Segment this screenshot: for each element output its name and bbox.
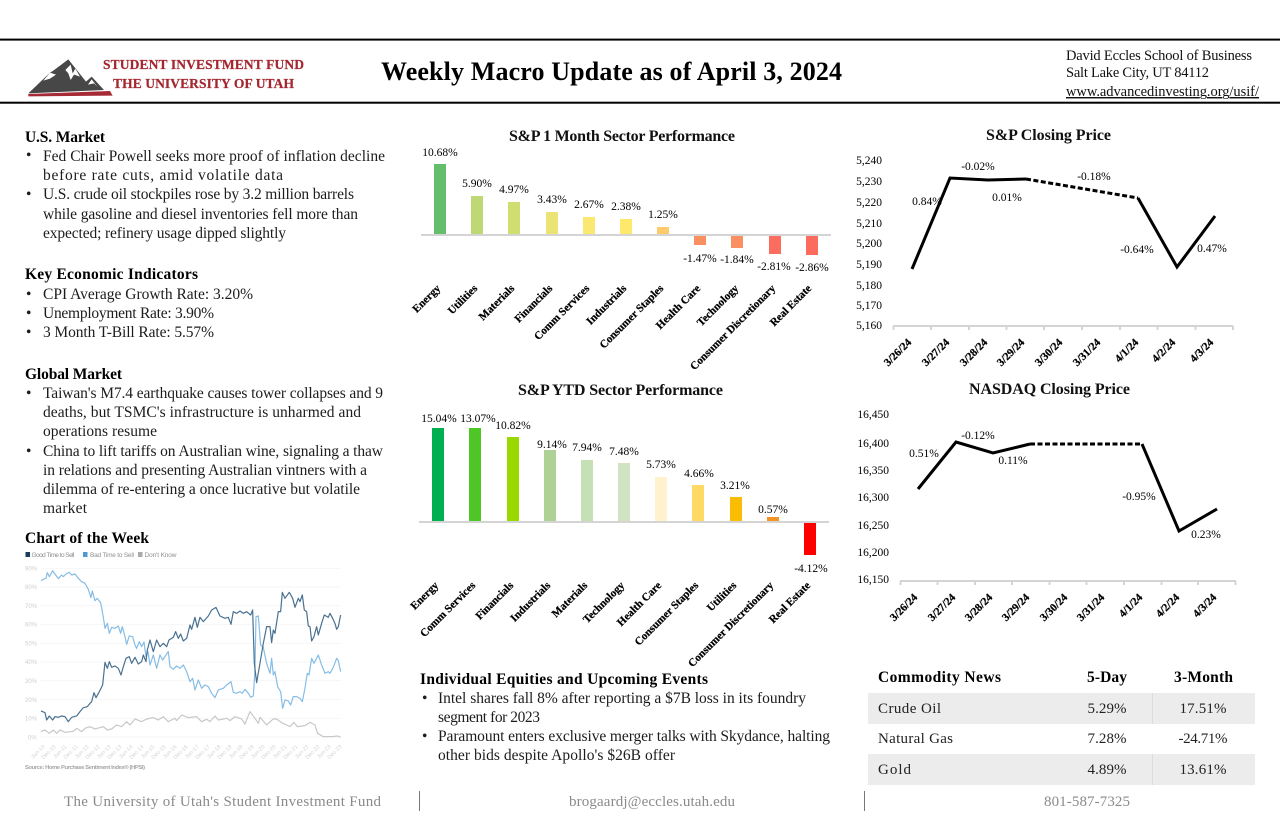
change labels: -0.95% bbox=[1122, 491, 1156, 503]
date labels: 3/26/24 bbox=[888, 591, 920, 624]
panel: Global Market bbox=[25, 366, 384, 517]
panel: Global Market: market bbox=[43, 500, 88, 517]
chart x axis labels: Jun-13 bbox=[96, 744, 112, 760]
y axis labels: 16,200 bbox=[857, 547, 889, 559]
value labels: 5.73% bbox=[646, 459, 676, 471]
chart: S&P 1 month sector performance bbox=[410, 128, 831, 373]
date labels: 3/28/24 bbox=[963, 591, 995, 624]
chart x axis labels: Dec-17 bbox=[195, 744, 211, 761]
panel: U.S. Market: • bbox=[26, 186, 31, 203]
chart: home purchase sentiment bbox=[25, 552, 343, 771]
price line bbox=[912, 178, 1215, 269]
category labels: Industrials bbox=[508, 579, 554, 624]
panel: individual equities and upcoming events: other bids despite Apollo's $26B offer bbox=[438, 747, 676, 764]
panel: U.S. Market: U.S. Market bbox=[25, 129, 106, 146]
value labels: 5.90% bbox=[462, 178, 492, 190]
panel: Global Market: • bbox=[26, 443, 31, 460]
change labels: 0.11% bbox=[998, 455, 1028, 467]
chart y axis: 80% bbox=[25, 585, 38, 591]
date labels: 4/1/24 bbox=[1117, 591, 1145, 620]
date labels: 4/1/24 bbox=[1113, 336, 1141, 365]
chart x axis labels: Jun-21 bbox=[272, 744, 288, 760]
value labels: 13.07% bbox=[460, 413, 496, 425]
chart x axis labels: Jun-14 bbox=[118, 744, 134, 760]
chart source: Source: Home Purchase Sentiment Index® (HPSI) bbox=[25, 764, 145, 771]
x axis bbox=[893, 326, 1233, 330]
chart y axis: 90% bbox=[25, 566, 38, 572]
value labels: 10.82% bbox=[495, 420, 531, 432]
category labels: Real Estate bbox=[767, 580, 813, 626]
footer bbox=[64, 791, 1130, 811]
panel: individual equities and upcoming events bbox=[420, 671, 830, 764]
chart x axis labels bbox=[30, 744, 343, 761]
change labels: 0.51% bbox=[909, 448, 939, 460]
chart x axis labels: Dec-16 bbox=[173, 744, 189, 761]
panel: Key Economic Indicators: CPI Average Growth Rate: 3.20% bbox=[43, 286, 253, 303]
date labels: 4/2/24 bbox=[1150, 336, 1178, 365]
y axis labels: 16,450 bbox=[857, 409, 889, 421]
category labels: Materials bbox=[477, 282, 518, 323]
change labels: -0.64% bbox=[1120, 244, 1154, 256]
panel: individual equities and upcoming events: segment for 2023 bbox=[438, 709, 540, 726]
y axis labels: 5,170 bbox=[856, 300, 882, 312]
value labels bbox=[422, 147, 829, 274]
category labels: Health Care bbox=[615, 580, 664, 629]
chart x axis labels: Jun-23 bbox=[316, 744, 332, 760]
y axis labels bbox=[857, 409, 889, 586]
value labels: 3.43% bbox=[537, 194, 567, 206]
price line bbox=[918, 442, 1217, 531]
category labels: Consumer Discretionary bbox=[686, 579, 776, 670]
chart x axis labels: Dec-14 bbox=[129, 744, 145, 761]
value labels: 9.14% bbox=[537, 439, 567, 451]
panel: Key Economic Indicators bbox=[25, 266, 253, 341]
panel: U.S. Market: expected; refinery usage dipped slightly bbox=[43, 225, 286, 242]
change labels: 0.47% bbox=[1197, 243, 1227, 255]
date labels: 3/27/24 bbox=[920, 336, 952, 369]
value labels: -1.84% bbox=[720, 254, 754, 266]
category labels: Consumer Staples bbox=[597, 282, 667, 351]
category labels: Materials bbox=[550, 579, 591, 620]
chart x axis labels: Dec-22 bbox=[305, 744, 321, 761]
date labels: 3/28/24 bbox=[958, 336, 990, 369]
panel: Key Economic Indicators: Key Economic Indicators bbox=[25, 266, 198, 283]
change labels bbox=[912, 161, 1227, 256]
category labels: Energy bbox=[410, 282, 443, 315]
chart x axis labels: Dec-10 bbox=[41, 744, 57, 761]
category labels: Real Estate bbox=[768, 283, 814, 329]
chart y axis: 20% bbox=[25, 698, 38, 704]
value labels: 15.04% bbox=[421, 413, 457, 425]
panel: Global Market: dilemma of re-entering a once lucrative but volatile bbox=[43, 481, 360, 498]
date labels: 3/30/24 bbox=[1038, 591, 1070, 624]
chart x axis labels: Jun-11 bbox=[53, 744, 68, 760]
change labels: 0.01% bbox=[992, 192, 1022, 204]
date labels: 4/3/24 bbox=[1188, 336, 1216, 365]
date labels: 4/3/24 bbox=[1191, 591, 1219, 620]
bars bbox=[419, 428, 829, 555]
y axis labels: 5,240 bbox=[856, 155, 882, 167]
chart y axis: 60% bbox=[25, 622, 38, 628]
value labels: -2.86% bbox=[795, 262, 829, 274]
category labels: Comm Services bbox=[532, 282, 593, 343]
y axis labels: 16,300 bbox=[857, 492, 889, 504]
y axis labels: 16,150 bbox=[857, 574, 889, 586]
value labels: 2.67% bbox=[574, 199, 604, 211]
panel: Key Economic Indicators: Unemployment Rate: 3.90% bbox=[43, 305, 214, 322]
header logo bbox=[28, 57, 304, 96]
panel: Key Economic Indicators: • bbox=[26, 286, 31, 303]
panel: Global Market: Taiwan's M7.4 earthquake causes tower collapses and 9 bbox=[43, 385, 383, 402]
chart x axis labels: Jun-16 bbox=[162, 744, 178, 760]
panel: individual equities and upcoming events: Individual Equities and Upcoming Events bbox=[420, 671, 708, 688]
value labels: 7.48% bbox=[609, 446, 639, 458]
chart x axis labels: Dec-11 bbox=[63, 744, 79, 761]
footer: brogaardj@eccles.utah.edu bbox=[569, 794, 736, 810]
table: commodity news: Commodity News bbox=[878, 669, 1001, 686]
value labels: 2.38% bbox=[611, 201, 641, 213]
chart x axis labels: Dec-23 bbox=[327, 744, 343, 761]
date labels: 3/31/24 bbox=[1071, 336, 1103, 369]
category labels: Utilities bbox=[446, 282, 481, 317]
panel: Key Economic Indicators: • bbox=[26, 324, 31, 341]
value labels: -4.12% bbox=[794, 563, 828, 575]
panel: U.S. Market bbox=[25, 129, 385, 242]
date labels: 4/2/24 bbox=[1154, 591, 1182, 620]
change labels bbox=[909, 430, 1221, 541]
value labels: -2.81% bbox=[757, 261, 791, 273]
x axis bbox=[900, 581, 1236, 585]
category labels: Health Care bbox=[654, 283, 703, 332]
chart x axis labels: Jun-17 bbox=[184, 744, 200, 760]
table: commodity news: 7.28% bbox=[1088, 731, 1126, 747]
panel: U.S. Market: Fed Chair Powell seeks more proof of inflation decline bbox=[43, 148, 385, 165]
chart x axis labels: Jun-19 bbox=[228, 744, 244, 760]
chart x axis labels: Dec-15 bbox=[151, 744, 167, 761]
value labels: 1.25% bbox=[648, 209, 678, 221]
header contact block: Salt Lake City, UT 84112 bbox=[1066, 65, 1209, 81]
y axis labels: 5,210 bbox=[856, 218, 882, 230]
chart title: S&P YTD Sector Performance bbox=[518, 382, 723, 399]
chart y axis: 50% bbox=[25, 642, 38, 648]
chart x axis labels: Jun-12 bbox=[74, 744, 90, 760]
chart x axis labels: Jun-10 bbox=[30, 744, 46, 760]
chart x axis labels: Dec-21 bbox=[283, 744, 299, 761]
chart y axis bbox=[25, 566, 38, 742]
y axis labels: 16,250 bbox=[857, 520, 889, 532]
panel: individual equities and upcoming events: Intel shares fall 8% after reporting a $7B loss in its foundry bbox=[438, 690, 806, 707]
table: commodity news bbox=[868, 669, 1255, 785]
value labels: 0.57% bbox=[758, 504, 788, 516]
date labels: 3/30/24 bbox=[1033, 336, 1065, 369]
chart x axis labels: Jun-15 bbox=[140, 744, 156, 760]
panel: Global Market: • bbox=[26, 385, 31, 402]
chart x axis labels: Jun-22 bbox=[294, 744, 310, 760]
footer: The University of Utah's Student Investment Fund bbox=[64, 794, 382, 810]
y axis labels: 5,200 bbox=[856, 238, 882, 250]
table: commodity news: -24.71% bbox=[1178, 731, 1228, 747]
value labels: 3.21% bbox=[720, 480, 750, 492]
panel: Key Economic Indicators: 3 Month T-Bill Rate: 5.57% bbox=[43, 324, 214, 341]
table: commodity news: 5-Day bbox=[1087, 669, 1127, 686]
category labels: Energy bbox=[408, 579, 441, 612]
y axis labels bbox=[856, 155, 882, 332]
footer: 801-587-7325 bbox=[1044, 794, 1130, 810]
chart legend: Good Time to Sell bbox=[32, 552, 75, 559]
date labels bbox=[882, 336, 1216, 369]
chart y axis: 70% bbox=[25, 604, 38, 610]
y axis labels: 5,220 bbox=[856, 197, 882, 209]
chart x axis labels: Jun-18 bbox=[206, 744, 222, 760]
header contact block: www.advancedinvesting.org/usif/ bbox=[1066, 84, 1260, 100]
logo text bbox=[103, 57, 304, 91]
panel: individual equities and upcoming events: • bbox=[422, 728, 427, 745]
date labels bbox=[888, 591, 1219, 624]
chart title: S&P Closing Price bbox=[986, 127, 1111, 144]
category labels: Technology bbox=[695, 282, 741, 329]
chart legend bbox=[26, 552, 177, 559]
panel: individual equities and upcoming events: Paramount enters exclusive merger talks with Skydance, halting bbox=[438, 728, 830, 745]
table: commodity news: Natural Gas bbox=[878, 731, 953, 747]
table: commodity news: 13.61% bbox=[1180, 762, 1226, 778]
chart x axis labels: Dec-19 bbox=[239, 744, 255, 761]
table: commodity news: 5.29% bbox=[1088, 701, 1126, 717]
logo text: THE UNIVERSITY OF UTAH bbox=[113, 76, 294, 91]
y axis labels: 5,180 bbox=[856, 280, 882, 292]
title: Weekly Macro Update as of April 3, 2024 bbox=[381, 57, 842, 86]
chart legend: Don't Know bbox=[144, 552, 177, 559]
chart y axis: 10% bbox=[25, 716, 38, 722]
change labels: -0.12% bbox=[961, 430, 995, 442]
chart x axis labels: Dec-20 bbox=[261, 744, 277, 761]
y axis labels: 16,350 bbox=[857, 465, 889, 477]
category labels: Consumer Staples bbox=[632, 579, 702, 648]
chart y axis: 40% bbox=[25, 660, 38, 666]
icon: mountain bbox=[28, 59, 113, 96]
value labels: 10.68% bbox=[422, 147, 458, 159]
table: commodity news: 17.51% bbox=[1180, 701, 1226, 717]
panel: Global Market: Global Market bbox=[25, 366, 123, 383]
header contact block bbox=[1066, 48, 1260, 100]
change labels: 0.23% bbox=[1191, 529, 1221, 541]
chart title: S&P 1 Month Sector Performance bbox=[509, 128, 735, 145]
value labels: -1.47% bbox=[683, 253, 717, 265]
change labels: -0.18% bbox=[1077, 171, 1111, 183]
panel: Global Market: in relations and presenting Australian vintners with a bbox=[43, 462, 367, 479]
chart legend: Bad Time to Sell bbox=[90, 552, 135, 559]
date labels: 3/29/24 bbox=[1000, 591, 1032, 624]
bars bbox=[421, 164, 831, 255]
chart title: NASDAQ Closing Price bbox=[969, 381, 1130, 398]
category labels: Technology bbox=[581, 579, 627, 626]
category labels: Financials bbox=[473, 579, 517, 622]
value labels: 7.94% bbox=[572, 442, 602, 454]
value labels: 4.97% bbox=[499, 184, 529, 196]
chart: S&P closing price bbox=[856, 127, 1233, 369]
logo text: STUDENT INVESTMENT FUND bbox=[103, 57, 304, 72]
y axis labels: 5,230 bbox=[856, 176, 882, 188]
panel: Global Market: China to lift tariffs on Australian wine, signaling a thaw bbox=[43, 443, 384, 460]
category labels bbox=[410, 282, 814, 373]
header contact block: David Eccles School of Business bbox=[1066, 48, 1252, 64]
category labels: Consumer Discretionary bbox=[688, 282, 778, 373]
panel: Key Economic Indicators: • bbox=[26, 305, 31, 322]
category labels: Financials bbox=[512, 282, 556, 325]
panel: individual equities and upcoming events: • bbox=[422, 690, 427, 707]
heading: Chart of the Week: Chart of the Week bbox=[25, 530, 149, 547]
date labels: 3/31/24 bbox=[1075, 591, 1107, 624]
date labels: 3/27/24 bbox=[926, 591, 958, 624]
category labels: Comm Services bbox=[418, 579, 479, 640]
chart y axis: 30% bbox=[25, 679, 38, 685]
category labels bbox=[408, 579, 813, 670]
y axis labels: 16,400 bbox=[857, 438, 889, 450]
chart x axis labels: Jun-20 bbox=[250, 744, 266, 760]
panel: U.S. Market: before rate cuts, amid volatile data bbox=[43, 167, 283, 184]
table: commodity news: Crude Oil bbox=[878, 701, 941, 717]
panel: Global Market: deaths, but TSMC's infrastructure is unharmed and bbox=[43, 404, 361, 421]
table: commodity news: 3-Month bbox=[1174, 669, 1233, 686]
table: commodity news: 4.89% bbox=[1088, 762, 1126, 778]
chart x axis labels: Dec-18 bbox=[217, 744, 233, 761]
change labels: -0.02% bbox=[961, 161, 995, 173]
date labels: 3/26/24 bbox=[882, 336, 914, 369]
chart plot lines bbox=[41, 568, 341, 737]
value labels bbox=[421, 413, 828, 575]
panel: U.S. Market: • bbox=[26, 147, 31, 164]
chart: S&P YTD sector performance bbox=[408, 382, 829, 670]
panel: U.S. Market: U.S. crude oil stockpiles rose by 3.2 million barrels bbox=[43, 186, 354, 203]
date labels: 3/29/24 bbox=[995, 336, 1027, 369]
y axis labels: 5,190 bbox=[856, 259, 882, 271]
category labels: Industrials bbox=[584, 282, 630, 327]
chart x axis labels: Dec-12 bbox=[85, 744, 101, 761]
panel: U.S. Market: while gasoline and diesel inventories fell more than bbox=[43, 206, 358, 223]
chart: NASDAQ closing price bbox=[857, 381, 1236, 624]
chart x axis labels: Dec-13 bbox=[107, 744, 123, 761]
category labels: Utilities bbox=[705, 579, 740, 614]
chart y axis: 0% bbox=[28, 736, 37, 742]
y axis labels: 5,160 bbox=[856, 320, 882, 332]
panel: Global Market: operations resume bbox=[43, 423, 157, 440]
value labels: 4.66% bbox=[684, 468, 714, 480]
change labels: 0.84% bbox=[912, 196, 942, 208]
table: commodity news: Gold bbox=[878, 762, 912, 778]
